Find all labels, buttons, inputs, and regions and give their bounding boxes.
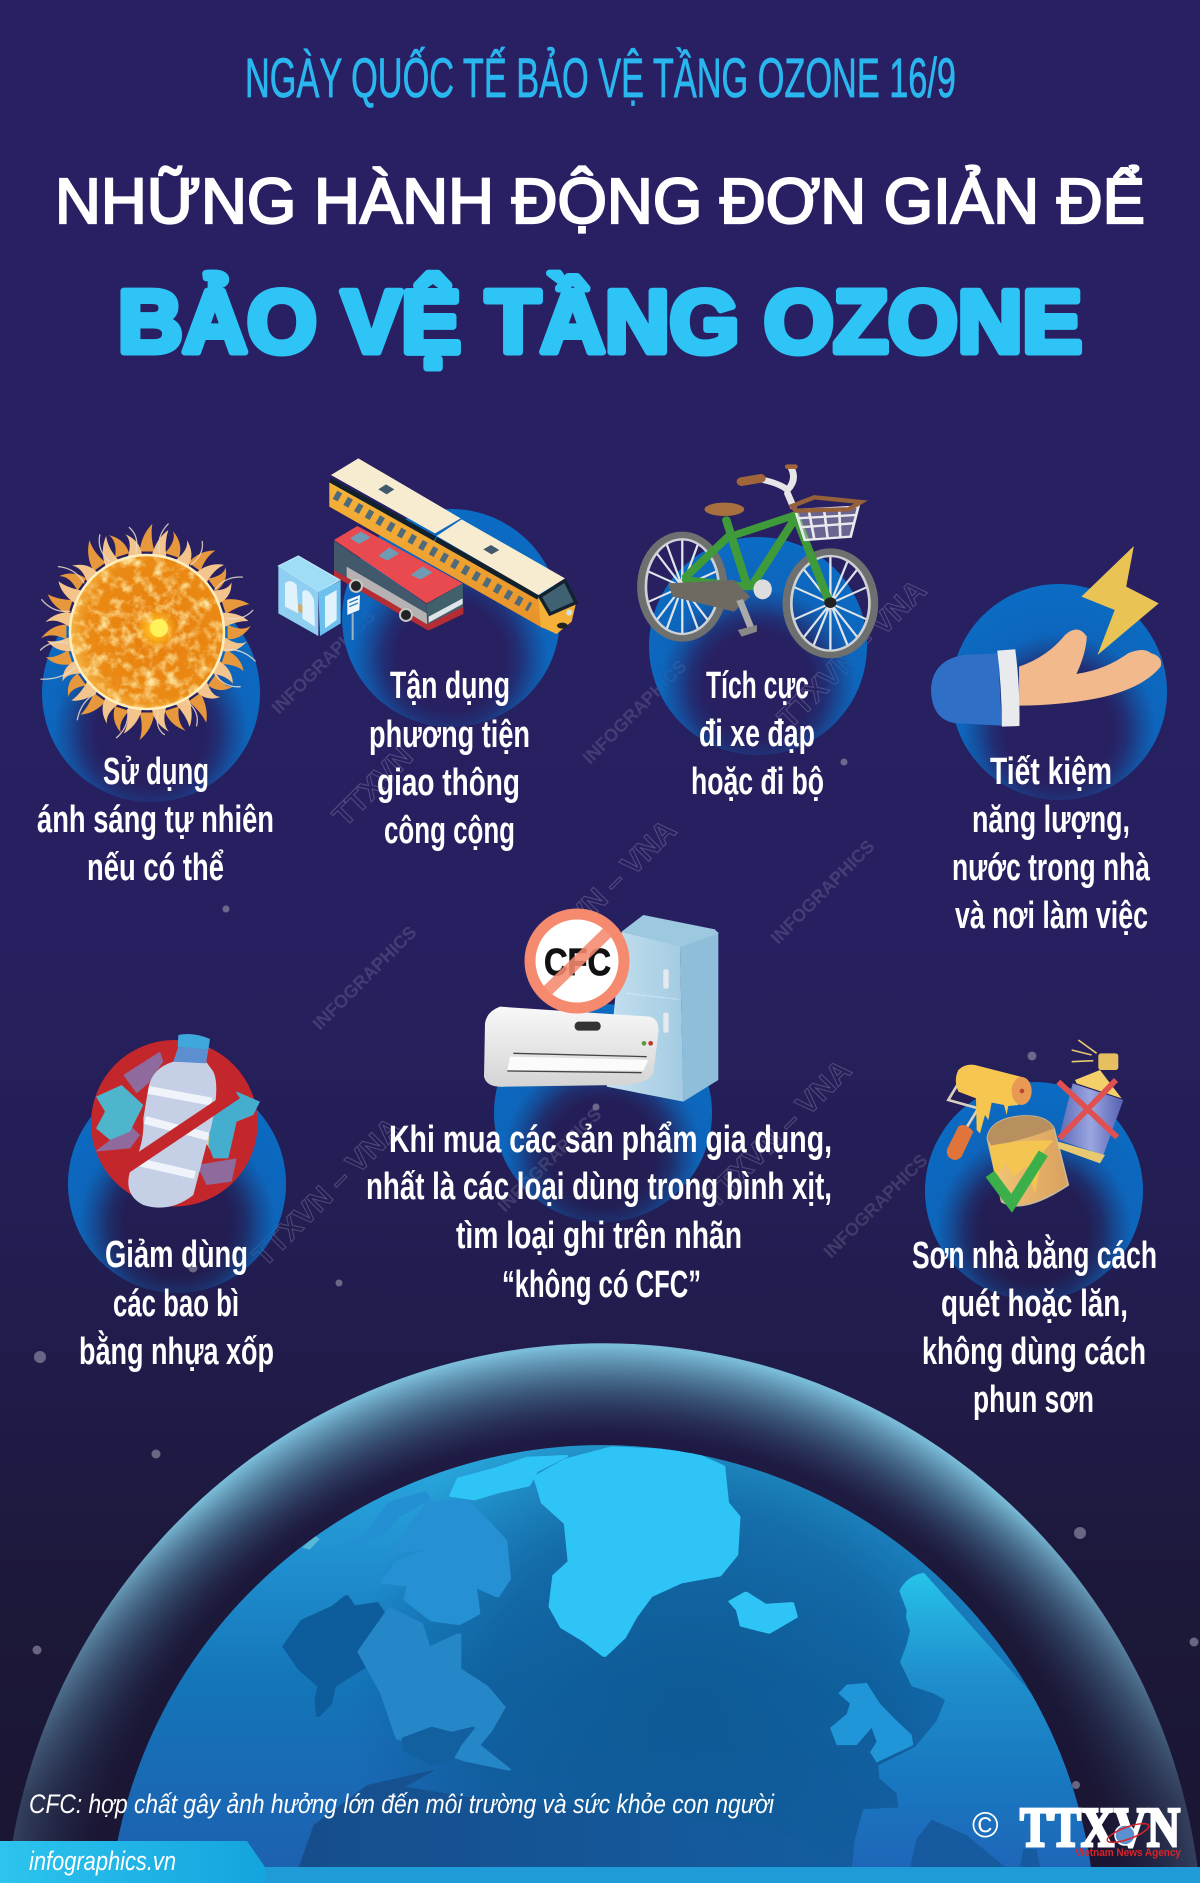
label: phương tiện: [369, 714, 530, 756]
label: [37, 751, 274, 889]
continents: [285, 1447, 1090, 1868]
label: [366, 1119, 832, 1306]
label: ánh sáng tự nhiên: [37, 799, 274, 841]
label: Tích cực: [706, 665, 809, 707]
copyright mark: ©: [972, 1804, 999, 1845]
background stars: [32, 758, 1198, 1789]
item: choose CFC-free products: [366, 914, 832, 1306]
label: quét hoặc lăn,: [941, 1283, 1128, 1325]
item: saving energy: [931, 546, 1167, 937]
item: reduce plastic foam packaging: [68, 1034, 286, 1373]
heading line 1: NHỮNG HÀNH ĐỘNG ĐƠN GIẢN ĐỂ: [55, 164, 1145, 237]
label: [369, 665, 530, 852]
blue disc: [494, 1004, 712, 1222]
icon: sun: [30, 513, 262, 750]
footer bar: [0, 1841, 1200, 1883]
blue disc: [342, 509, 560, 727]
label: Giảm dùng: [105, 1234, 248, 1276]
icon: train, bus and bus stop: [278, 458, 576, 640]
blue disc: [42, 584, 260, 802]
label: [79, 1234, 274, 1373]
blue disc: [951, 584, 1167, 800]
website: infographics.vn: [29, 1846, 176, 1876]
item: brush or roll paint: [912, 1040, 1157, 1421]
logo: TTXVN: Vietnam News Agency: [1075, 1847, 1182, 1859]
icon: no CFC sign: CFC: [544, 942, 611, 984]
title block: [55, 46, 1145, 371]
label: đi xe đạp: [699, 713, 815, 755]
faint watermarks: INFOGRAPHICS: [579, 656, 690, 768]
faint watermarks: INFOGRAPHICS: [494, 1104, 605, 1216]
heading line 2: BẢO VỆ TẦNG OZONE: [118, 272, 1082, 371]
label: bằng nhựa xốp: [79, 1329, 274, 1373]
icon: paint roller, bucket and spray can: [947, 1040, 1123, 1206]
faint watermarks: INFOGRAPHICS: [309, 922, 420, 1034]
icon: no CFC sign: [530, 914, 624, 1008]
globe: [111, 1445, 1093, 1883]
label: “không có CFC”: [502, 1264, 701, 1306]
faint watermarks: [247, 574, 933, 1273]
icon: bicycle: [641, 467, 874, 655]
label: Sử dụng: [103, 751, 209, 793]
label: phun sơn: [973, 1379, 1094, 1421]
item: public transport: [278, 458, 576, 852]
icon: banned plastic bottle: [91, 1034, 260, 1208]
faint watermarks: INFOGRAPHICS: [268, 606, 379, 718]
label: công cộng: [384, 810, 515, 852]
label: [691, 665, 824, 803]
blue disc: [68, 1075, 286, 1293]
faint watermarks: TTXVN – VNA: [522, 814, 683, 975]
faint watermarks: TTXVN: [327, 740, 419, 833]
label: [952, 751, 1151, 937]
footnote: CFC definition: CFC: hợp chất gây ảnh hưởng lớn đến môi trường và sức khỏe con người: [29, 1789, 775, 1819]
label: nếu có thể: [87, 847, 224, 889]
faint watermarks: INFOGRAPHICS: [767, 836, 878, 948]
label: năng lượng,: [972, 799, 1130, 841]
faint watermarks: TTXVN – VNA: [772, 574, 933, 735]
label: Tiết kiệm: [990, 751, 1112, 793]
item: cycling or walking: [641, 467, 874, 803]
item: natural light: [30, 513, 274, 889]
faint watermarks: TTXVN – VNA: [247, 1112, 408, 1273]
faint watermarks: INFOGRAPHICS: [820, 1150, 931, 1262]
label: tìm loại ghi trên nhãn: [456, 1215, 742, 1257]
label: giao thông: [377, 762, 520, 804]
label: các bao bì: [113, 1283, 239, 1325]
icon: fridge and air conditioner: [484, 915, 718, 1102]
faint watermarks: TTXVN – VNA: [697, 1054, 858, 1215]
icon: hand with lightning bolt: [931, 546, 1161, 727]
label: nhất là các loại dùng trong bình xịt,: [366, 1166, 832, 1208]
label: Khi mua các sản phẩm gia dụng,: [389, 1119, 832, 1161]
ozone layer dome: [6, 1343, 1200, 1883]
blue disc: [925, 1082, 1143, 1300]
label: [912, 1233, 1157, 1421]
blue disc: [649, 537, 867, 755]
label: Tận dụng: [390, 665, 510, 707]
label: hoặc đi bộ: [691, 761, 824, 803]
